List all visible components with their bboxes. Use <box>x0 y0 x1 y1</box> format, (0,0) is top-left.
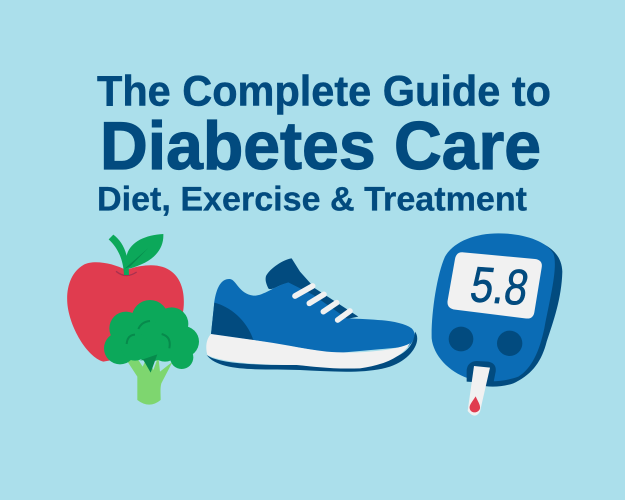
icon: glucose meter <box>432 233 562 416</box>
icon: apple <box>67 234 184 362</box>
meter screen <box>447 252 542 319</box>
test strip slot <box>467 361 496 383</box>
meter reading: 5.8 <box>466 257 533 316</box>
title <box>97 68 551 218</box>
icon: running shoe <box>206 258 417 372</box>
subtitle: Diet, Exercise & Treatment <box>97 180 527 218</box>
test strip <box>468 366 490 416</box>
blood drop <box>470 396 480 412</box>
meter buttons <box>449 327 522 356</box>
title line 1: The Complete Guide to <box>97 68 551 116</box>
icon: apple and broccoli <box>67 234 199 405</box>
icon: broccoli <box>104 300 199 405</box>
shoe laces <box>295 286 350 320</box>
title line 2: Diabetes Care <box>100 108 541 184</box>
